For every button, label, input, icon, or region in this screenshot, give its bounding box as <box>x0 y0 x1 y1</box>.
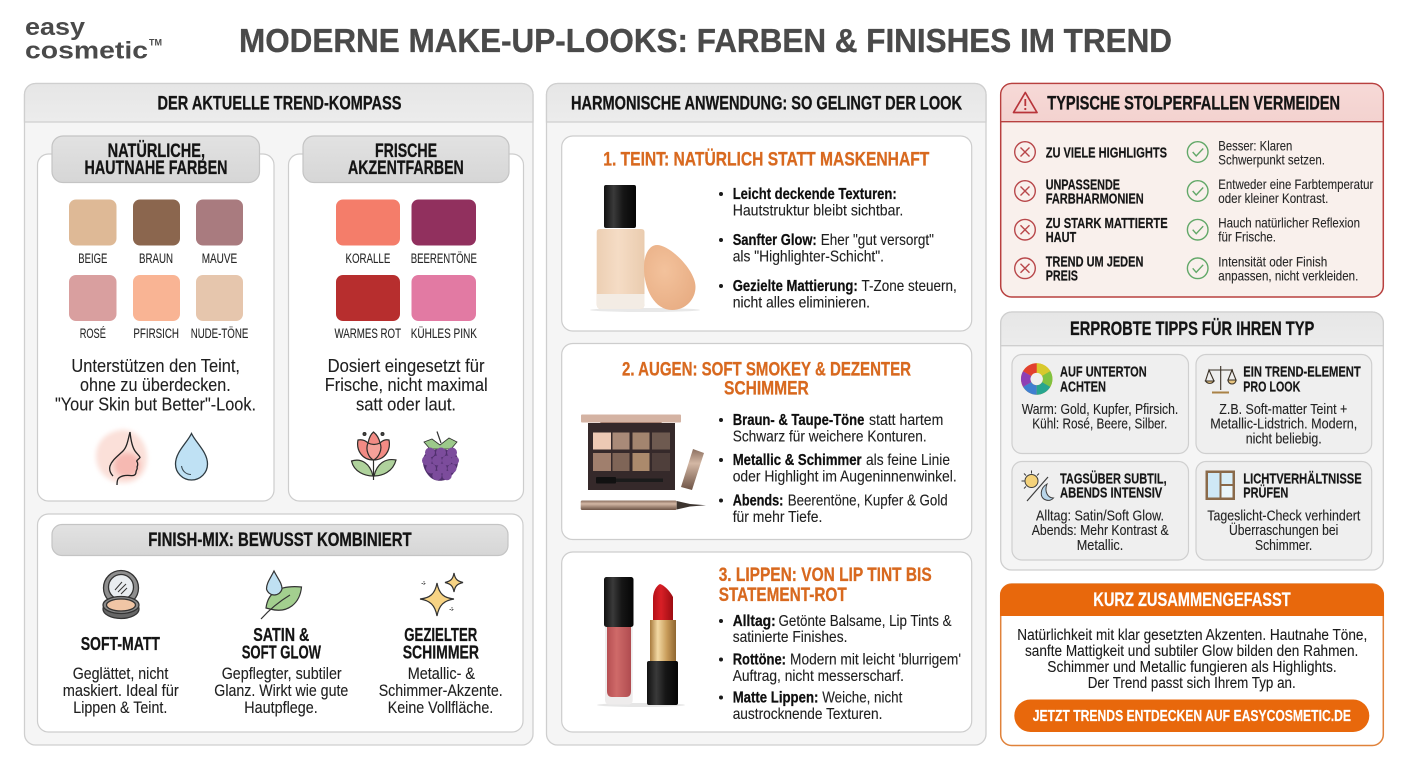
heading: augen <box>622 358 911 400</box>
text: natural description: Unterstützen den Teint, <box>71 355 240 376</box>
heading: harmonische anwendung: HARMONISCHE ANWENDUNG: SO GELINGT DER LOOK <box>571 94 962 114</box>
tip card: tagsüber: Abends: Mehr Kontrast & <box>1032 523 1169 539</box>
icon: scale <box>1206 366 1236 392</box>
card: teint <box>562 136 972 331</box>
list: augen tips <box>719 412 957 526</box>
text: solutions: Besser: Klaren <box>1218 137 1292 153</box>
heading: zusammengefasst: KURZ ZUSAMMENGEFASST <box>1093 590 1291 611</box>
panel: der aktuelle trend-kompass <box>24 84 533 745</box>
tip card: ein trend-element: Z.B. Soft-matter Teint + <box>1219 402 1347 418</box>
swatches: accent tones: KÜHLES PINK <box>411 326 477 341</box>
tip card: unterton: Warm: Gold, Kupfer, Pfirsich. <box>1022 402 1178 418</box>
finish: soft-matt: Lippen & Teint. <box>73 699 167 717</box>
finish: gezielter schimmer: Metallic- & <box>408 665 475 683</box>
panel: kurz zusammengefasst <box>1000 584 1384 746</box>
finish: satin und soft glow: Gepflegter, subtiler <box>222 665 342 683</box>
swatches: accent tones: KORALLE <box>346 251 390 266</box>
list: augen tips: statt hartem <box>869 412 943 429</box>
text: solutions: Intensität oder Finish <box>1218 253 1327 269</box>
panel: erprobte tipps <box>1001 312 1383 570</box>
image: eyeshadow palette and liner <box>581 414 706 510</box>
swatches: natural tones: MAUVE <box>202 251 237 266</box>
list: lippen tips: Matte Lippen: <box>733 690 818 707</box>
text: solutions <box>1218 137 1374 283</box>
label pill: finish-mix: FINISH-MIX: BEWUSST KOMBINIERT <box>148 530 412 551</box>
swatches: natural tones: BRAUN <box>139 251 173 266</box>
text: solutions: Hauch natürlicher Reflexion <box>1218 215 1360 231</box>
tip card: unterton: Kühl: Rosé, Beere, Silber. <box>1032 417 1167 433</box>
label pill: natürliche farben: HAUTNAHE FARBEN <box>84 158 228 179</box>
image: foundation bottle and sponge <box>590 185 700 312</box>
list: lippen tips: Weiche, nicht <box>822 690 903 707</box>
finish: gezielter schimmer <box>379 573 503 717</box>
text: pitfalls: HAUT <box>1046 230 1076 246</box>
list: lippen tips <box>719 613 961 723</box>
text: pitfalls: TREND UM JEDEN <box>1046 255 1143 271</box>
swatches: accent tones <box>334 200 477 341</box>
list: augen tips: Braun- & Taupe-Töne <box>733 412 864 429</box>
text: solutions: anpassen, nicht verkleiden. <box>1218 267 1358 283</box>
text: summary: sanfte Mattigkeit und subtiler Glow bilden den Rahmen. <box>1025 643 1358 660</box>
text: accent description <box>325 355 488 415</box>
finish: satin und soft glow <box>214 571 348 717</box>
list: lippen tips: Auftrag, nicht messerscharf. <box>733 668 904 685</box>
text: pitfalls: FARBHARMONIEN <box>1046 191 1144 207</box>
list: teint tips: nicht alles eliminieren. <box>733 294 870 311</box>
list: lippen tips: satinierte Finishes. <box>733 629 847 646</box>
list: teint tips: als "Highlighter-Schicht". <box>733 249 884 266</box>
title: MODERNE MAKE-UP-LOOKS: FARBEN & FINISHES IM TREND <box>239 22 1172 59</box>
text: summary: Der Trend passt sich Ihrem Typ an. <box>1088 675 1296 692</box>
list: augen tips: Beerentöne, Kupfer & Gold <box>788 493 948 510</box>
text: solutions: für Frische. <box>1218 229 1276 245</box>
text: accent description: satt oder laut. <box>356 394 456 415</box>
tip card: lichtverhältnisse: PRÜFEN <box>1243 485 1288 502</box>
list: lippen tips: Modern mit leicht 'blurrigem' <box>790 651 961 668</box>
icon: warning triangle <box>1014 92 1037 112</box>
icon: sparkles <box>420 573 463 616</box>
text: accent description: Dosiert eingesetzt für <box>328 355 484 376</box>
text: natural description: ohne zu überdecken. <box>80 374 231 395</box>
finish: soft-matt: SOFT-MATT <box>81 634 160 654</box>
list: lippen tips: austrocknende Texturen. <box>733 706 882 723</box>
label pill: natürliche farben <box>52 136 260 182</box>
swatches: natural tones <box>69 200 248 341</box>
list: teint tips: Hautstruktur bleibt sichtbar. <box>733 203 903 220</box>
heading: trend-kompass: DER AKTUELLE TREND-KOMPASS <box>158 94 402 114</box>
icon: tulip <box>352 432 396 480</box>
list: teint tips: T-Zone steuern, <box>862 278 957 295</box>
heading: lippen: 3. LIPPEN: VON LIP TINT BIS <box>719 564 932 586</box>
icon: water drop <box>176 434 208 480</box>
tip card: ein trend-element: Metallic-Lidstrich. Modern, <box>1210 417 1357 433</box>
icon: leaf with drop <box>261 571 302 619</box>
heading: tipps: ERPROBTE TIPPS FÜR IHREN TYP <box>1070 319 1315 340</box>
tip card: ein trend-element <box>1196 354 1372 454</box>
label pill: natürliche farben: NATÜRLICHE, <box>108 141 205 162</box>
text: summary <box>1017 627 1367 692</box>
tip card: unterton: AUF UNTERTON <box>1060 364 1147 381</box>
list: augen tips: oder Highlight im Augeninnenwinkel. <box>733 469 957 486</box>
list: lippen tips: Alltag: <box>733 613 776 630</box>
list: teint tips: Gezielte Mattierung: <box>733 278 858 295</box>
swatches: accent tones: WARMES ROT <box>334 326 401 341</box>
swatches: accent tones: BEERENTÖNE <box>411 251 477 266</box>
logo: easy cosmetic: TM <box>149 38 162 48</box>
icon: colour wheel <box>1026 368 1048 390</box>
text: solutions: oder kleiner Kontrast. <box>1218 190 1328 206</box>
list: augen tips: als feine Linie <box>866 452 950 469</box>
heading: lippen <box>719 564 932 606</box>
tip card: lichtverhältnisse: Überraschungen bei <box>1229 521 1338 539</box>
text: pitfalls: ZU VIELE HIGHLIGHTS <box>1046 145 1167 161</box>
text: summary: Natürlichkeit mit klar gesetzten Akzenten. Hautnahe Töne, <box>1017 627 1367 644</box>
label pill: akzentfarben: FRISCHE <box>375 141 437 162</box>
finish: soft-matt <box>63 570 179 717</box>
finish: soft-matt: Geglättet, nicht <box>73 665 169 683</box>
list: teint tips: Sanfter Glow: <box>733 232 817 249</box>
text: solutions: Schwerpunkt setzen. <box>1218 151 1325 167</box>
label pill: akzentfarben: AKZENTFARBEN <box>348 158 464 179</box>
tip card: lichtverhältnisse: Schimmer. <box>1255 538 1312 554</box>
logo: easy cosmetic: easy <box>25 14 86 41</box>
finish: satin und soft glow: SATIN & <box>253 625 309 645</box>
card: frische akzentfarben <box>288 136 524 501</box>
logo: easy cosmetic <box>25 14 162 64</box>
label pill: finish-mix <box>52 524 508 556</box>
card: lippen <box>562 552 972 732</box>
tip card: tagsüber <box>1012 462 1188 560</box>
text: pitfalls <box>1046 145 1168 285</box>
tip card: tagsüber: TAGSÜBER SUBTIL, <box>1060 470 1167 487</box>
text: pitfalls: ZU STARK MATTIERTE <box>1046 216 1168 232</box>
finish: gezielter schimmer: Keine Vollfläche. <box>388 699 493 717</box>
list: augen tips: Abends: <box>733 493 783 510</box>
text: summary: Schimmer und Metallic fungieren als Highlights. <box>1047 659 1337 676</box>
heading: teint: 1. TEINT: NATÜRLICH STATT MASKENHAFT <box>603 148 929 170</box>
list: augen tips: für mehr Tiefe. <box>733 509 822 526</box>
list: augen tips: Schwarz für weichere Konturen. <box>733 428 927 445</box>
tip card: ein trend-element: PRO LOOK <box>1243 379 1300 396</box>
card: finish-mix <box>38 514 523 732</box>
text: pitfalls: PREIS <box>1046 269 1078 285</box>
button: call to action <box>1014 700 1369 732</box>
tip card: lichtverhältnisse: LICHTVERHÄLTNISSE <box>1243 470 1362 487</box>
icon: face profile <box>96 430 147 485</box>
heading: lippen: STATEMENT-ROT <box>719 584 847 606</box>
icon: compact powder <box>103 570 139 618</box>
tip card: ein trend-element: EIN TREND-ELEMENT <box>1243 364 1361 381</box>
heading: augen: 2. AUGEN: SOFT SMOKEY & DEZENTER <box>622 358 911 380</box>
tip card: tagsüber: Alltag: Satin/Soft Glow. <box>1036 508 1164 524</box>
finish: gezielter schimmer: SCHIMMER <box>403 642 479 662</box>
icons: check marks <box>1187 142 1208 279</box>
list: teint tips: Eher "gut versorgt" <box>821 232 934 249</box>
tip card: unterton: ACHTEN <box>1060 379 1106 396</box>
text: natural description <box>55 355 256 415</box>
card: natürliche, hautnahe farben <box>38 136 274 501</box>
icons: x marks <box>1015 142 1035 279</box>
text: natural description: "Your Skin but Better"-Look. <box>55 394 256 415</box>
tip card: ein trend-element: nicht beliebig. <box>1246 431 1322 447</box>
logo: easy cosmetic: cosmetic <box>25 38 148 64</box>
list: augen tips: Metallic & Schimmer <box>733 452 862 469</box>
heading: augen: SCHIMMER <box>724 378 809 400</box>
icon: sun and moon <box>1022 470 1054 501</box>
text: pitfalls: UNPASSENDE <box>1046 177 1120 193</box>
tip card: tagsüber: ABENDS INTENSIV <box>1060 485 1162 502</box>
finish: gezielter schimmer: GEZIELTER <box>404 625 477 645</box>
list: lippen tips: Getönte Balsame, Lip Tints & <box>778 613 952 630</box>
card: augen <box>562 344 972 540</box>
finish: satin und soft glow: SOFT GLOW <box>242 642 321 662</box>
swatches: natural tones: BEIGE <box>78 251 107 266</box>
panel: typische stolperfallen <box>1001 84 1383 297</box>
icon: window <box>1206 470 1235 500</box>
swatches: natural tones: PFIRSICH <box>133 326 179 341</box>
finish: gezielter schimmer: Schimmer-Akzente. <box>379 682 503 700</box>
swatches: natural tones: NUDE-TÖNE <box>191 326 248 341</box>
image: lip gloss and lipstick <box>597 577 685 707</box>
swatches: natural tones: ROSÉ <box>80 326 106 341</box>
list: teint tips <box>719 186 957 311</box>
list: lippen tips: Rottöne: <box>733 651 786 668</box>
tip card: unterton <box>1012 354 1188 454</box>
tip card: lichtverhältnisse: Tageslicht-Check verhindert <box>1207 508 1360 524</box>
text: accent description: Frische, nicht maximal <box>325 374 488 395</box>
tip card: tagsüber: Metallic. <box>1077 538 1123 554</box>
icon: berry <box>422 432 459 481</box>
tip card: lichtverhältnisse <box>1196 462 1372 560</box>
list: teint tips: Leicht deckende Texturen: <box>733 186 897 203</box>
text: solutions: Entweder eine Farbtemperatur <box>1218 176 1374 192</box>
panel: harmonische anwendung <box>546 84 986 745</box>
label pill: akzentfarben <box>303 136 509 182</box>
finish: satin und soft glow: Hautpflege. <box>244 699 318 717</box>
finish: soft-matt: maskiert. Ideal für <box>63 682 179 700</box>
finish: satin und soft glow: Glanz. Wirkt wie gute <box>214 682 348 700</box>
